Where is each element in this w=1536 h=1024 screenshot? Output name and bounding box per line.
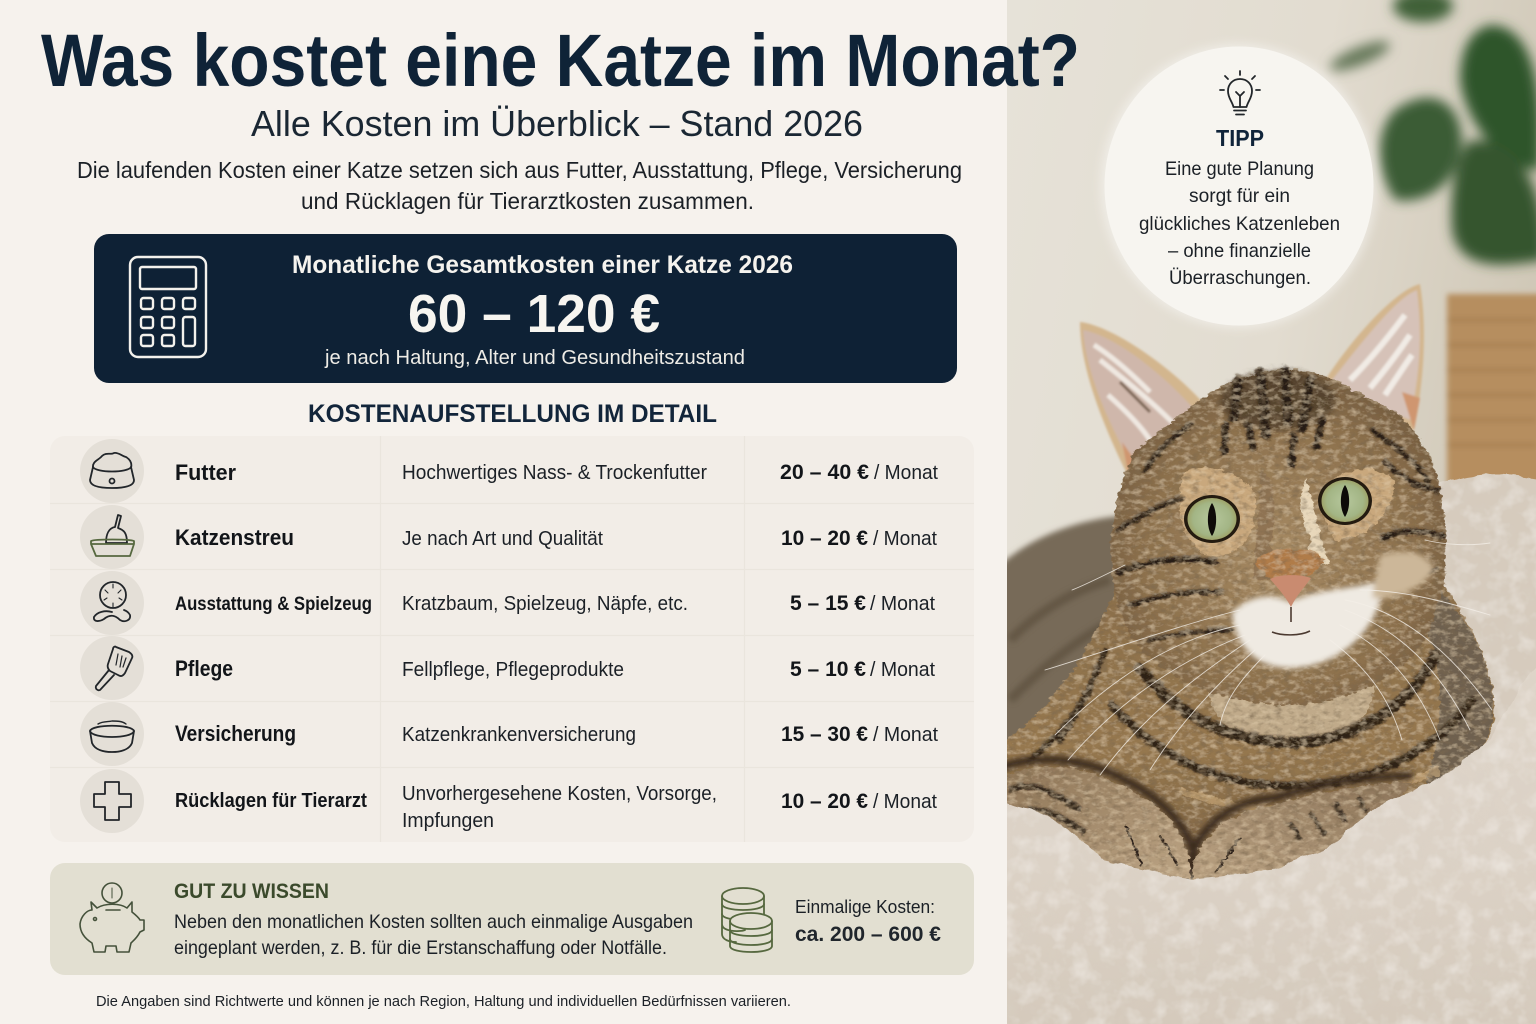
subtitle: Alle Kosten im Überblick – Stand 2026 (251, 103, 863, 144)
row: Katzenstreu: Je nach Art und Qualität (402, 528, 603, 550)
icon: medical cross (94, 782, 131, 820)
row: Rücklagen für Tierarzt: Impfungen (402, 810, 494, 832)
icon: grooming brush (96, 647, 132, 690)
row: Ausstattung & Spielzeug: / Monat (870, 593, 935, 615)
section heading: KOSTENAUFSTELLUNG IM DETAIL (308, 400, 717, 428)
row: Katzenstreu: 10 – 20 € (781, 527, 868, 550)
good to know text: eingeplant werden, z. B. für die Erstanschaffung oder Notfälle. (174, 937, 667, 959)
row: Pflege: 5 – 10 € (790, 658, 866, 681)
arms and paws (1000, 759, 1412, 890)
row: Futter (80, 439, 938, 503)
panel: good to know (50, 863, 974, 975)
eyes (1184, 477, 1372, 543)
tip text (1139, 158, 1340, 289)
good to know text: Neben den monatlichen Kosten sollten auch einmalige Ausgaben (174, 911, 693, 933)
row: Versicherung: 15 – 30 € (781, 723, 868, 746)
row: Versicherung: / Monat (873, 724, 938, 746)
intro paragraph: Die laufenden Kosten einer Katze setzen sich aus Futter, Ausstattung, Pflege, Versicherung (77, 157, 962, 183)
icon: litter tray with scoop (91, 515, 134, 556)
banner heading: Monatliche Gesamtkosten einer Katze 2026 (292, 251, 793, 279)
row: Ausstattung & Spielzeug (80, 571, 935, 635)
tip heading: TIPP (1216, 125, 1264, 151)
photo: tabby cat in a bed (1000, 0, 1536, 1024)
row: Katzenstreu: Katzenstreu (175, 525, 294, 550)
row: Versicherung: Versicherung (175, 721, 296, 746)
total cost banner (94, 234, 957, 383)
row: Rücklagen für Tierarzt (80, 769, 937, 833)
icon: piggy bank (80, 883, 144, 952)
footnote: Die Angaben sind Richtwerte und können je nach Region, Haltung und individuellen Bedürfnissen variieren. (96, 993, 791, 1010)
one-off costs amount: ca. 200 – 600 € (795, 922, 941, 946)
basket (1447, 294, 1536, 489)
ears (1080, 284, 1424, 480)
row: Futter: / Monat (874, 462, 938, 484)
good to know text (174, 911, 693, 959)
row: Futter: Futter (175, 460, 236, 485)
row: Pflege (80, 636, 935, 700)
intro paragraph: und Rücklagen für Tierarztkosten zusammen. (301, 188, 754, 214)
tip text: Überraschungen. (1169, 267, 1311, 289)
icon: bowl (90, 721, 134, 752)
banner note: je nach Haltung, Alter und Gesundheitszustand (324, 346, 745, 369)
row: Rücklagen für Tierarzt: Unvorhergesehene Kosten, Vorsorge, (402, 783, 717, 805)
row: Futter: 20 – 40 € (780, 461, 869, 484)
intro paragraph (77, 157, 962, 214)
row: Futter: Hochwertiges Nass- & Trockenfutter (402, 462, 707, 484)
row: Pflege: Fellpflege, Pflegeprodukte (402, 659, 624, 681)
tip text: sorgt für ein (1189, 185, 1290, 207)
row: Versicherung (80, 702, 938, 766)
row: Pflege: / Monat (870, 659, 935, 681)
icon: calculator (130, 257, 206, 357)
row: Rücklagen für Tierarzt: / Monat (873, 791, 937, 813)
good to know heading: GUT ZU WISSEN (174, 880, 329, 903)
muzzle (1232, 552, 1435, 668)
tip text: Eine gute Planung (1165, 158, 1314, 180)
row: Rücklagen für Tierarzt: 10 – 20 € (781, 790, 868, 813)
title: Was kostet eine Katze im Monat? (41, 19, 1080, 102)
row: Ausstattung & Spielzeug: Kratzbaum, Spielzeug, Näpfe, etc. (402, 593, 688, 615)
nose (1270, 575, 1311, 635)
row: Pflege: Pflege (175, 656, 233, 681)
row: Ausstattung & Spielzeug: Ausstattung & Spielzeug (175, 593, 372, 615)
icon: light bulb (1220, 71, 1260, 114)
bed: back rim (1000, 474, 1536, 830)
row: Katzenstreu (80, 505, 937, 569)
tip text: – ohne finanzielle (1168, 240, 1311, 262)
row: Ausstattung & Spielzeug: 5 – 15 € (790, 592, 866, 615)
icon: yarn ball toy (94, 582, 130, 621)
tip text: glückliches Katzenleben (1139, 213, 1340, 235)
bed: front cushion (1000, 650, 1536, 1024)
cat head (1111, 370, 1446, 705)
one-off costs label: Einmalige Kosten: (795, 896, 935, 917)
icon: coin stacks (722, 888, 772, 952)
row: Versicherung: Katzenkrankenversicherung (402, 724, 636, 746)
cat body (1000, 580, 1495, 880)
whiskers (1045, 540, 1492, 775)
row: Rücklagen für Tierarzt: Rücklagen für Tierarzt (175, 790, 367, 812)
plant (1327, 0, 1536, 265)
banner amount: 60 – 120 € (408, 284, 660, 344)
callout: tip bubble (1101, 44, 1377, 328)
icon: food bowl (90, 453, 134, 488)
background: left panel (0, 0, 1007, 1024)
cost table (50, 436, 974, 842)
row: Katzenstreu: / Monat (873, 528, 937, 550)
